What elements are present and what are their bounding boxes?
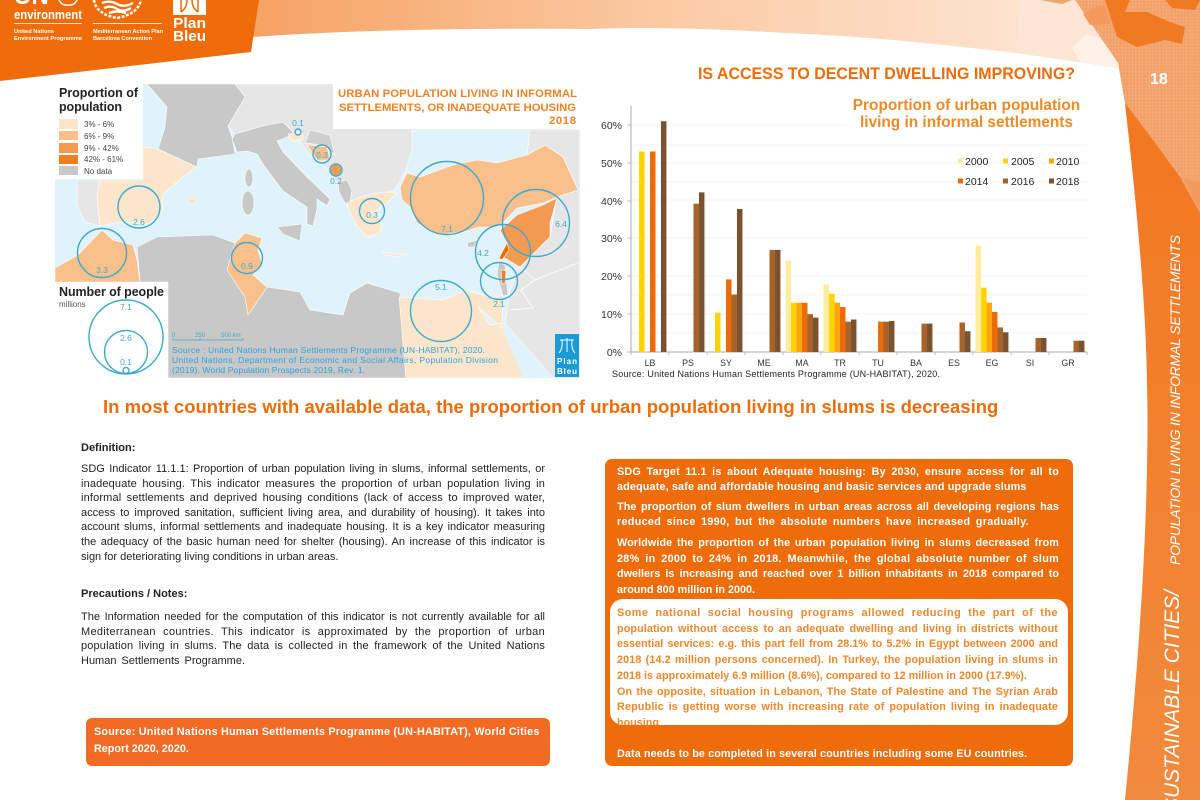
chart title (846, 97, 1087, 131)
callout: national programs: 2018 is approximately 6.9 million (8.6%), compared to 12 million in 2000 (17.9%). (617, 670, 1027, 682)
bars: MA (786, 260, 818, 352)
precautions text: The Information needed for the computation of this indicator is not currently available for all (81, 611, 545, 623)
map title: URBAN POPULATION LIVING IN INFORMAL (338, 88, 577, 100)
precautions text: Mediterranean countries. This indicator is approximated by the proportion of urban (81, 626, 545, 638)
y axis labels: 20% (601, 271, 622, 283)
x axis labels: ES (948, 358, 960, 368)
definition text: inadequate housing. This indicator measures the proportion of urban population living in (81, 478, 545, 490)
source box: Report 2020, 2020. (94, 743, 189, 755)
bars: ES (959, 322, 970, 352)
chart title: Proportion of urban population (853, 97, 1080, 114)
chart title: living in informal settlements (860, 114, 1073, 131)
legend: proportion of population: population (59, 100, 122, 114)
logo: UN environment (14, 0, 83, 42)
bubbles: 0.3 (366, 210, 378, 220)
definition text: access to improved sanitation, sufficient living area, and durability of housing). It takes into (81, 507, 545, 519)
callout: national programs: essential services: e.g. this part fell from 28.1% to 5.2% in Egypt between 2000 and (617, 638, 1058, 650)
key message: slum dwellers (617, 501, 1059, 528)
legend: proportion of population: 42% - 61% (84, 155, 123, 164)
icon: Plan Bleu logo: Plan (557, 357, 577, 366)
bars: LB (639, 121, 666, 352)
bubbles: 5.1 (435, 282, 447, 292)
icon: Plan Bleu logo: Bleu (557, 367, 577, 376)
callout: national programs: 2018 (14.2 million persons concerned). In Turkey, the population living in slums in (617, 654, 1058, 666)
definition text: the adequacy of the basic human need for shelter (housing). An increase of this indicator is (81, 536, 545, 548)
key message: worldwide: around 800 million in 2000. (617, 584, 755, 596)
definition text: informal settlements and deprived housing conditions (lack of access to improved water, (81, 492, 545, 504)
legend: proportion of population: 3% - 6% (84, 120, 114, 129)
x axis labels: EG (986, 358, 999, 368)
bars: PS (693, 192, 704, 352)
legend: proportion of population (55, 84, 143, 179)
key message: data gap: Data needs to be completed in several countries including some EU countries. (617, 748, 1027, 760)
bars: EG (976, 246, 1008, 352)
precautions text (81, 611, 545, 667)
logo: Mediterranean Action Plan: Mediterranean Action Plan (93, 29, 164, 35)
x axis labels: MA (795, 358, 809, 368)
x axis labels: SI (1026, 358, 1034, 368)
sidebar title (1161, 234, 1184, 800)
legend: number of people: millions (59, 300, 86, 309)
legend: number of people: 7.1 (120, 302, 132, 312)
bubbles: 7.1 (441, 224, 453, 234)
logo: UN environment: United Nations (14, 29, 54, 35)
precautions text: population living in slums. The data is collected in the framework of the United Nations (81, 640, 545, 652)
x axis labels: PS (682, 358, 694, 368)
legend: proportion of population: Proportion of (59, 86, 139, 100)
scale bar: 250 (195, 333, 206, 339)
key message: worldwide: 28% in 2000 to 24% in 2018. Meanwhile, the global absolute number of slum (617, 553, 1059, 565)
bars: GR (1073, 341, 1084, 352)
map title: 2018 (549, 115, 576, 127)
map title (333, 84, 580, 129)
bars: ME (769, 250, 780, 352)
definition text: account slums, informal settlements and inadequate housing. It is a key indicator measuring (81, 521, 545, 533)
chart legend: 2010 (1056, 156, 1080, 168)
key message: worldwide (617, 537, 1059, 596)
callout: national programs (610, 599, 1068, 725)
y axis labels: 0% (607, 347, 622, 359)
callout: national programs: population without access to an adequate dwelling and living in districts without (617, 623, 1058, 635)
panel: key messages (605, 459, 1073, 766)
y axis labels: 30% (601, 233, 622, 245)
bubbles: 3.3 (96, 265, 108, 275)
legend: number of people (55, 282, 168, 378)
callout: national programs: Some national social housing programs allowed reducing the part of the (617, 607, 1058, 619)
bubbles: 0.1 (292, 118, 304, 128)
source box (86, 718, 550, 766)
bubbles: 0.2 (330, 176, 342, 186)
map title: SETTLEMENTS, OR INADEQUATE HOUSING (339, 102, 576, 114)
y axis labels: 60% (601, 120, 622, 132)
y axis labels: 10% (601, 309, 622, 321)
key message: slum dwellers: The proportion of slum dwellers in urban areas across all developing regions has (617, 501, 1059, 513)
bars: TR (824, 284, 856, 352)
key message: SDG target (617, 466, 1059, 493)
chart legend: 2016 (1011, 176, 1035, 188)
bar chart (601, 106, 1088, 379)
legend: proportion of population: 9% - 42% (84, 144, 119, 153)
legend: number of people: Number of people (59, 285, 164, 299)
logo: Plan Bleu: Plan (173, 16, 206, 32)
chart legend: 2018 (1056, 176, 1080, 188)
key message: slum dwellers: reduced since 1990, but the absolute numbers have increased gradually. (617, 516, 1029, 528)
map source: United Nations, Department of Economic and Social Affairs, Population Division (172, 355, 498, 365)
x axis labels: GR (1061, 358, 1075, 368)
map source: Source : United Nations Human Settlements Programme (UN-HABITAT), 2020. (172, 345, 485, 355)
y axis labels (601, 120, 622, 359)
source box: Source: United Nations Human Settlements Programme (UN-HABITAT), World Cities (94, 726, 540, 738)
chart source: Source: United Nations Human Settlements Programme (UN-HABITAT), 2020. (612, 369, 940, 379)
logo: Plan Bleu (173, 0, 206, 44)
bubbles: 2.6 (133, 217, 145, 227)
bubbles (78, 118, 570, 342)
bubbles: 6.4 (555, 219, 567, 229)
y axis labels: 40% (601, 196, 622, 208)
map source: (2019). World Population Prospects 2019, Rev. 1. (172, 365, 365, 375)
legend: proportion of population: 6% - 9% (84, 132, 114, 141)
precautions heading: Precautions / Notes: (81, 588, 187, 600)
logo: Mediterranean Action Plan: Barcelona Convention (93, 36, 153, 42)
bubbles: 2.1 (493, 299, 505, 309)
bubbles: 0.9 (241, 261, 253, 271)
definition text (81, 463, 545, 563)
bars: SY (715, 209, 742, 352)
definition heading: Definition: (81, 442, 135, 454)
chart legend: 2014 (965, 176, 989, 188)
x axis labels (645, 358, 1075, 368)
legend: proportion of population: No data (84, 167, 113, 176)
page number: 18 (1150, 71, 1168, 88)
callout: national programs: Republic is getting worse with increasing rate of population living in inadequate (617, 701, 1058, 713)
map source (172, 345, 498, 375)
bars: SI (1035, 338, 1046, 352)
precautions text: Human Settlements Programme. (81, 655, 245, 667)
logo: UN environment: Environment Programme (14, 36, 82, 42)
key message: worldwide: Worldwide the proportion of the urban population living in slums decreased from (617, 537, 1059, 549)
legend: number of people: 2.6 (120, 333, 132, 343)
logo: Mediterranean Action Plan (92, 0, 164, 42)
chart legend: 2005 (1011, 156, 1035, 168)
icon: Plan Bleu logo (555, 334, 579, 377)
x axis labels: LB (645, 358, 656, 368)
definition text: sign for deteriorating living conditions in urban areas. (81, 551, 338, 563)
main heading: In most countries with available data, the proportion of urban population living in slums is decreasing (103, 396, 998, 417)
x axis labels: TR (834, 358, 846, 368)
chart legend: 2000 (965, 156, 989, 168)
callout: national programs: On the opposite, situation in Lebanon, The State of Palestine and The Syrian Arab (617, 686, 1058, 698)
x axis labels: ME (757, 358, 771, 368)
bars: TU (878, 321, 894, 352)
bubbles: 0.3 (316, 150, 328, 160)
grid and axis (627, 106, 1087, 355)
sidebar title: POPULATION LIVING IN INFORMAL SETTLEMENTS (1167, 234, 1183, 565)
key message: worldwide: dwellers is increasing and reached over 1 billion inhabitants in 2018 compared to (617, 568, 1059, 580)
panel: map of urban population in informal settlements (55, 84, 580, 378)
x axis labels: SY (720, 358, 732, 368)
scale bar: 0 (172, 333, 176, 339)
scale bar (172, 333, 243, 340)
x axis labels: BA (910, 358, 922, 368)
key message: SDG target: adequate, safe and affordable housing and basic services and upgrade slums (617, 481, 1026, 493)
key message: SDG target: SDG Target 11.1 is about Adequate housing: By 2030, ensure access for all to (617, 466, 1059, 478)
bars: BA (921, 324, 932, 352)
x axis labels: TU (872, 358, 884, 368)
bubbles: 4.2 (477, 248, 489, 258)
legend: number of people: 0.1 (120, 357, 132, 367)
scale bar: 500 km (221, 333, 241, 339)
definition text: SDG Indicator 11.1.1: Proportion of urban population living in slums, informal settlements, or (81, 463, 545, 475)
y axis labels: 50% (601, 158, 622, 170)
chart legend (958, 156, 1080, 188)
